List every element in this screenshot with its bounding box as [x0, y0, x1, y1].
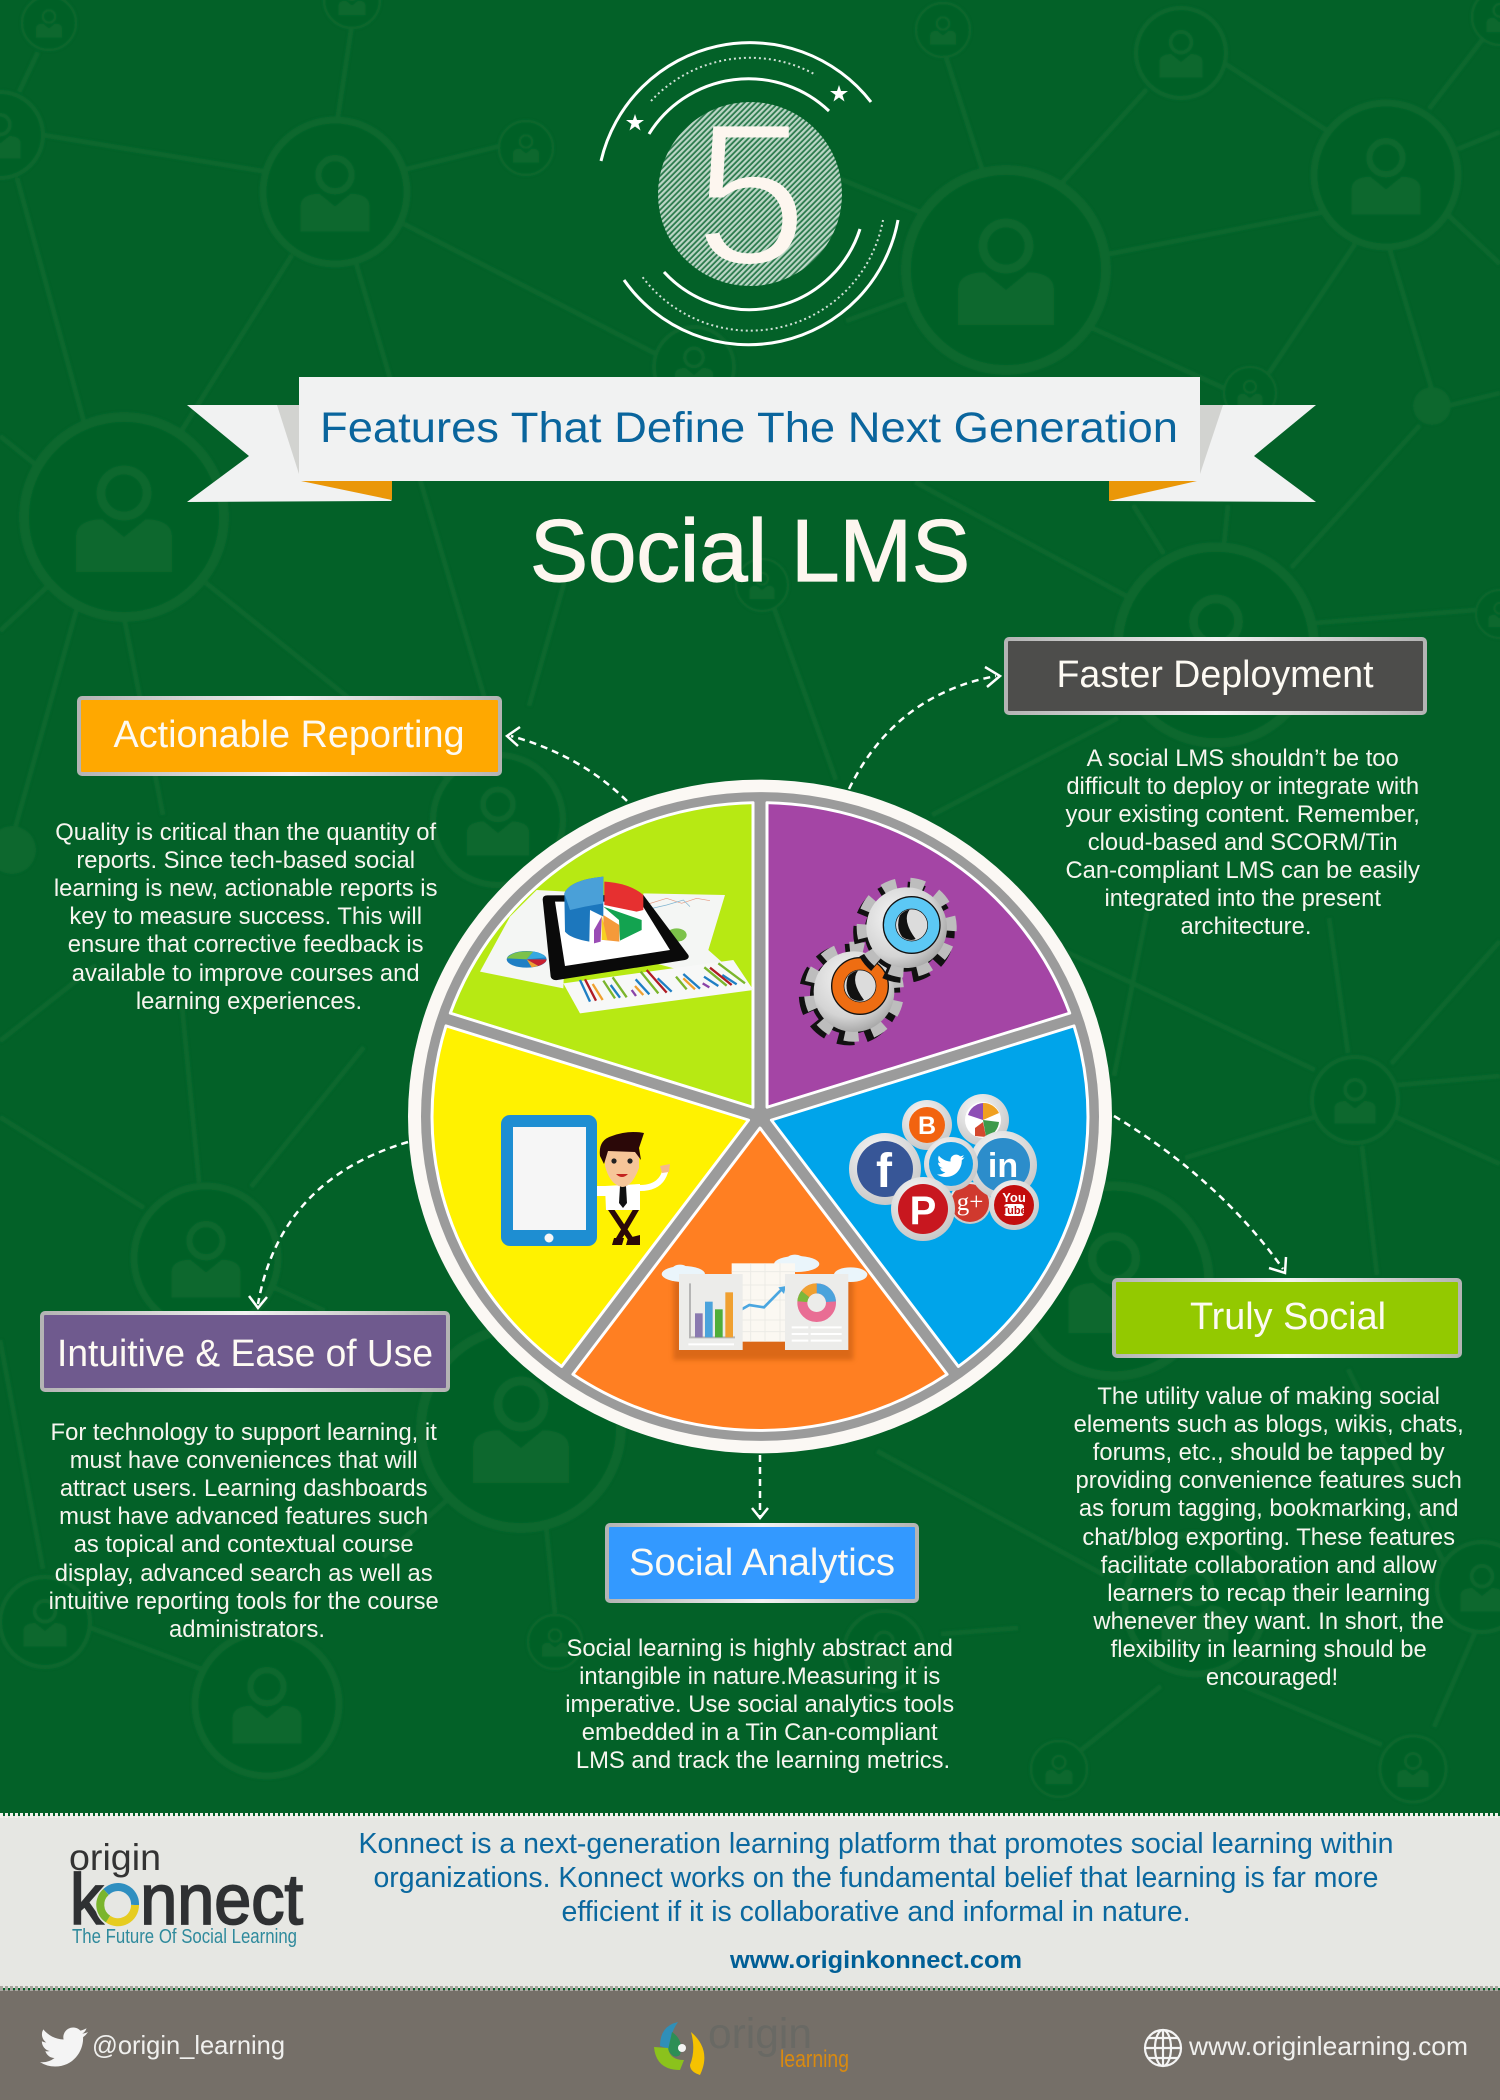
panel: Faster Deployment: [1006, 639, 1427, 940]
icon: reports and tablet: [480, 877, 753, 1013]
logo: origin konnect: konnect: [70, 1861, 303, 1940]
body text: chat/blog exporting. These features: [1082, 1524, 1455, 1551]
segment: blue: [771, 1026, 1088, 1366]
facebook: [849, 1133, 921, 1205]
ribbon banner: [187, 377, 1316, 502]
body text: must have advanced features such: [59, 1503, 428, 1530]
body text: For technology to support learning, it: [51, 1419, 437, 1446]
pinterest: [891, 1177, 955, 1241]
body text: as topical and contextual course: [74, 1531, 414, 1558]
body text: architecture.: [1181, 913, 1311, 940]
panel: Actionable Reporting: [54, 698, 500, 1015]
linkedin: in: [988, 1147, 1018, 1185]
title: Social LMS: [530, 501, 970, 600]
logo: origin learning: [654, 2010, 849, 2075]
body text: learners to recap their learning: [1107, 1580, 1430, 1607]
about text: efficient if it is collaborative and informal in nature.: [562, 1896, 1190, 1928]
arrow: to Social Analytics: [752, 1455, 768, 1518]
label box: Social Analytics: [629, 1542, 895, 1584]
label box: Truly Social: [1190, 1296, 1386, 1338]
badge: number 5: 5: [695, 81, 807, 308]
body text: encouraged!: [1206, 1664, 1338, 1691]
body text: as forum tagging, bookmarking, and: [1079, 1495, 1459, 1522]
body text: must have conveniences that will: [70, 1447, 418, 1474]
website: www.originlearning.com: [1188, 2031, 1468, 2061]
icon: analytics reports: [662, 1255, 867, 1360]
body text: embedded in a Tin Can-compliant: [582, 1719, 938, 1746]
icon: social media cluster: [849, 1094, 1039, 1241]
icon: gears: [796, 873, 962, 1048]
label box: [1006, 639, 1425, 713]
body text: reports. Since tech-based social: [76, 847, 415, 874]
body text: display, advanced search as well as: [55, 1560, 433, 1587]
pinterest: P: [910, 1189, 936, 1233]
body text: flexibility in learning should be: [1111, 1636, 1427, 1663]
man: [597, 1132, 670, 1245]
logo: origin konnect: [69, 1837, 303, 1948]
label box: [1114, 1280, 1460, 1356]
body text: forums, etc., should be tapped by: [1093, 1439, 1445, 1466]
body text: attract users. Learning dashboards: [60, 1475, 428, 1502]
body text: administrators.: [169, 1616, 325, 1643]
body text: Can-compliant LMS can be easily: [1065, 857, 1420, 884]
body text: Quality is critical than the quantity of: [55, 819, 437, 846]
about text: organizations. Konnect works on the fundamental belief that learning is far more: [374, 1862, 1378, 1894]
badge: number 5: [601, 43, 898, 345]
logo: origin learning: learning: [780, 2046, 849, 2073]
arrow: to Intuitive and Ease of Use: [249, 1142, 408, 1308]
ribbon heading: Features That Define The Next Generation: [320, 404, 1178, 452]
segment: orange: [573, 1128, 947, 1430]
body text: learning experiences.: [136, 988, 362, 1015]
blogger: [902, 1100, 952, 1150]
icon: globe: [1145, 2030, 1181, 2066]
about text: [358, 1828, 1394, 1928]
segment: lime: [450, 803, 753, 1107]
body text: elements such as blogs, wikis, chats,: [1074, 1411, 1464, 1438]
label box: Intuitive & Ease of Use: [57, 1333, 433, 1375]
gear: blue: [849, 873, 962, 986]
body text: cloud-based and SCORM/Tin: [1088, 829, 1398, 856]
about text: Konnect is a next-generation learning platform that promotes social learning within: [358, 1828, 1394, 1860]
segment: yellow: [432, 1026, 749, 1366]
body text: The utility value of making social: [1097, 1383, 1440, 1410]
panel: Konnect about band: [0, 1816, 1500, 1988]
twitter handle: @origin_learning: [92, 2030, 285, 2060]
body text: facilitate collaboration and allow: [1101, 1552, 1437, 1579]
arrow: to Truly Social: [1114, 1116, 1286, 1273]
logo: origin konnect: The Future Of Social Learning: [72, 1926, 297, 1948]
gear: orange: [796, 938, 907, 1048]
youtube: You: [1002, 1190, 1026, 1205]
body text: available to improve courses and: [72, 960, 420, 987]
pie chart wheel: [408, 780, 1112, 1453]
youtube: [989, 1180, 1039, 1230]
body text: ensure that corrective feedback is: [68, 931, 424, 958]
body text: your existing content. Remember,: [1065, 801, 1420, 828]
body text: integrated into the present: [1104, 885, 1381, 912]
body text: learning is new, actionable reports is: [54, 875, 438, 902]
label box: [79, 698, 500, 774]
body text: whenever they want. In short, the: [1092, 1608, 1444, 1635]
panel: Truly Social: [1074, 1280, 1470, 1691]
panel: Intuitive and Ease of Use: [42, 1313, 448, 1643]
blogger: B: [918, 1112, 936, 1140]
body text: intangible in nature.Measuring it is: [579, 1663, 940, 1690]
body text: Social learning is highly abstract and: [567, 1635, 953, 1662]
arrow: to Faster Deployment: [849, 667, 1000, 789]
label box: Actionable Reporting: [114, 714, 464, 756]
body text: key to measure success. This will: [69, 903, 422, 930]
body text: providing convenience features such: [1076, 1467, 1462, 1494]
logo: origin konnect: origin: [69, 1837, 161, 1878]
logo: origin learning: origin: [708, 2010, 812, 2058]
website link: www.originkonnect.com: [729, 1947, 1022, 1974]
body text: imperative. Use social analytics tools: [565, 1691, 954, 1718]
google plus: g+: [957, 1189, 983, 1216]
arrow: to Actionable Reporting: [507, 727, 627, 801]
facebook: f: [876, 1145, 893, 1198]
body text: A social LMS shouldn’t be too: [1087, 745, 1399, 772]
label box: [607, 1525, 917, 1601]
twitter: [924, 1137, 978, 1191]
google plus: [949, 1182, 991, 1224]
label box: Faster Deployment: [1056, 654, 1374, 696]
icon: tablet and man: [501, 1115, 670, 1246]
body text: LMS and track the learning metrics.: [576, 1747, 950, 1774]
picasa: [957, 1094, 1009, 1146]
body text: difficult to deploy or integrate with: [1066, 773, 1419, 800]
label box: [42, 1313, 448, 1390]
panel: Social Analytics: [565, 1525, 961, 1774]
segment: purple: [767, 803, 1070, 1107]
linkedin: [969, 1131, 1037, 1199]
panel: footer: [0, 1988, 1500, 2100]
icon: twitter bird: [40, 2027, 88, 2066]
youtube: Tube: [1001, 1205, 1027, 1217]
body text: intuitive reporting tools for the course: [49, 1588, 439, 1615]
